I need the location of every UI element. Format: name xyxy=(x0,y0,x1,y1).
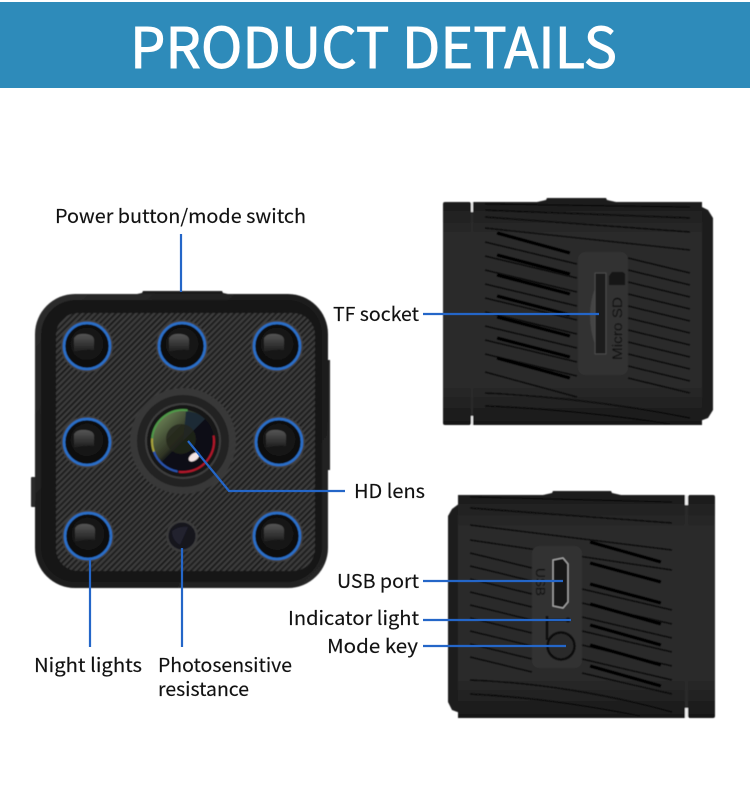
vent slots xyxy=(497,233,570,378)
title: PRODUCT DETAILS xyxy=(130,4,617,85)
label: power button: Power button/mode switch xyxy=(55,202,306,229)
left cap xyxy=(448,503,460,713)
leader line: photosensitive resistance xyxy=(181,548,183,647)
side stripes xyxy=(470,497,672,716)
photosensitive resistor xyxy=(166,520,198,552)
camera body frame xyxy=(35,294,328,588)
rear band xyxy=(688,495,715,718)
top button xyxy=(537,198,616,202)
front band xyxy=(443,202,471,425)
label: TF socket: TF socket xyxy=(333,300,419,327)
micro SD text: Micro SD xyxy=(609,297,625,360)
main body xyxy=(458,495,685,718)
TF card slot xyxy=(590,288,595,345)
night light 1 xyxy=(61,320,113,372)
camera side view: USB and mode key xyxy=(448,491,715,718)
camera side view: TF socket xyxy=(443,198,713,425)
night light 4 xyxy=(61,416,113,468)
label: USB port: USB port xyxy=(337,567,419,594)
leader line: indicator light xyxy=(423,619,571,621)
night light 3 xyxy=(251,320,303,372)
USB port xyxy=(553,558,568,608)
header banner xyxy=(0,2,750,88)
indicator light and mode key xyxy=(547,616,574,660)
port panel xyxy=(532,546,582,668)
side stripes xyxy=(485,204,690,424)
label: photosensitive resistance xyxy=(158,651,292,702)
label: mode key: Mode key xyxy=(327,632,418,659)
night light 5 xyxy=(253,416,305,468)
right cap xyxy=(700,206,713,421)
leader line: power button xyxy=(180,234,182,292)
label: night lights: Night lights xyxy=(34,651,142,678)
label: photosensitive resistance: Photosensitive xyxy=(158,651,292,678)
camera front view xyxy=(31,291,330,588)
leader line: HD lens xyxy=(188,441,345,491)
textured face panel xyxy=(56,313,315,571)
leader line: TF socket xyxy=(423,313,599,315)
top button xyxy=(543,491,621,495)
leader line: mode key xyxy=(423,645,566,647)
port panel xyxy=(578,252,628,375)
night light 6 xyxy=(62,510,114,562)
power button on top xyxy=(132,291,233,295)
leader line: night lights xyxy=(89,558,91,647)
camera lens xyxy=(130,388,236,494)
label: photosensitive resistance: resistance xyxy=(158,675,249,702)
label: HD lens: HD lens xyxy=(354,477,425,504)
main body xyxy=(473,202,702,425)
night light 2 xyxy=(156,320,208,372)
label: indicator light: Indicator light xyxy=(288,604,419,631)
USB text: USB xyxy=(533,568,548,596)
night light 7 xyxy=(251,510,303,562)
micro SD icon xyxy=(609,272,625,285)
leader line: USB port xyxy=(423,580,563,582)
side button xyxy=(31,477,36,507)
vent slots xyxy=(590,542,661,686)
